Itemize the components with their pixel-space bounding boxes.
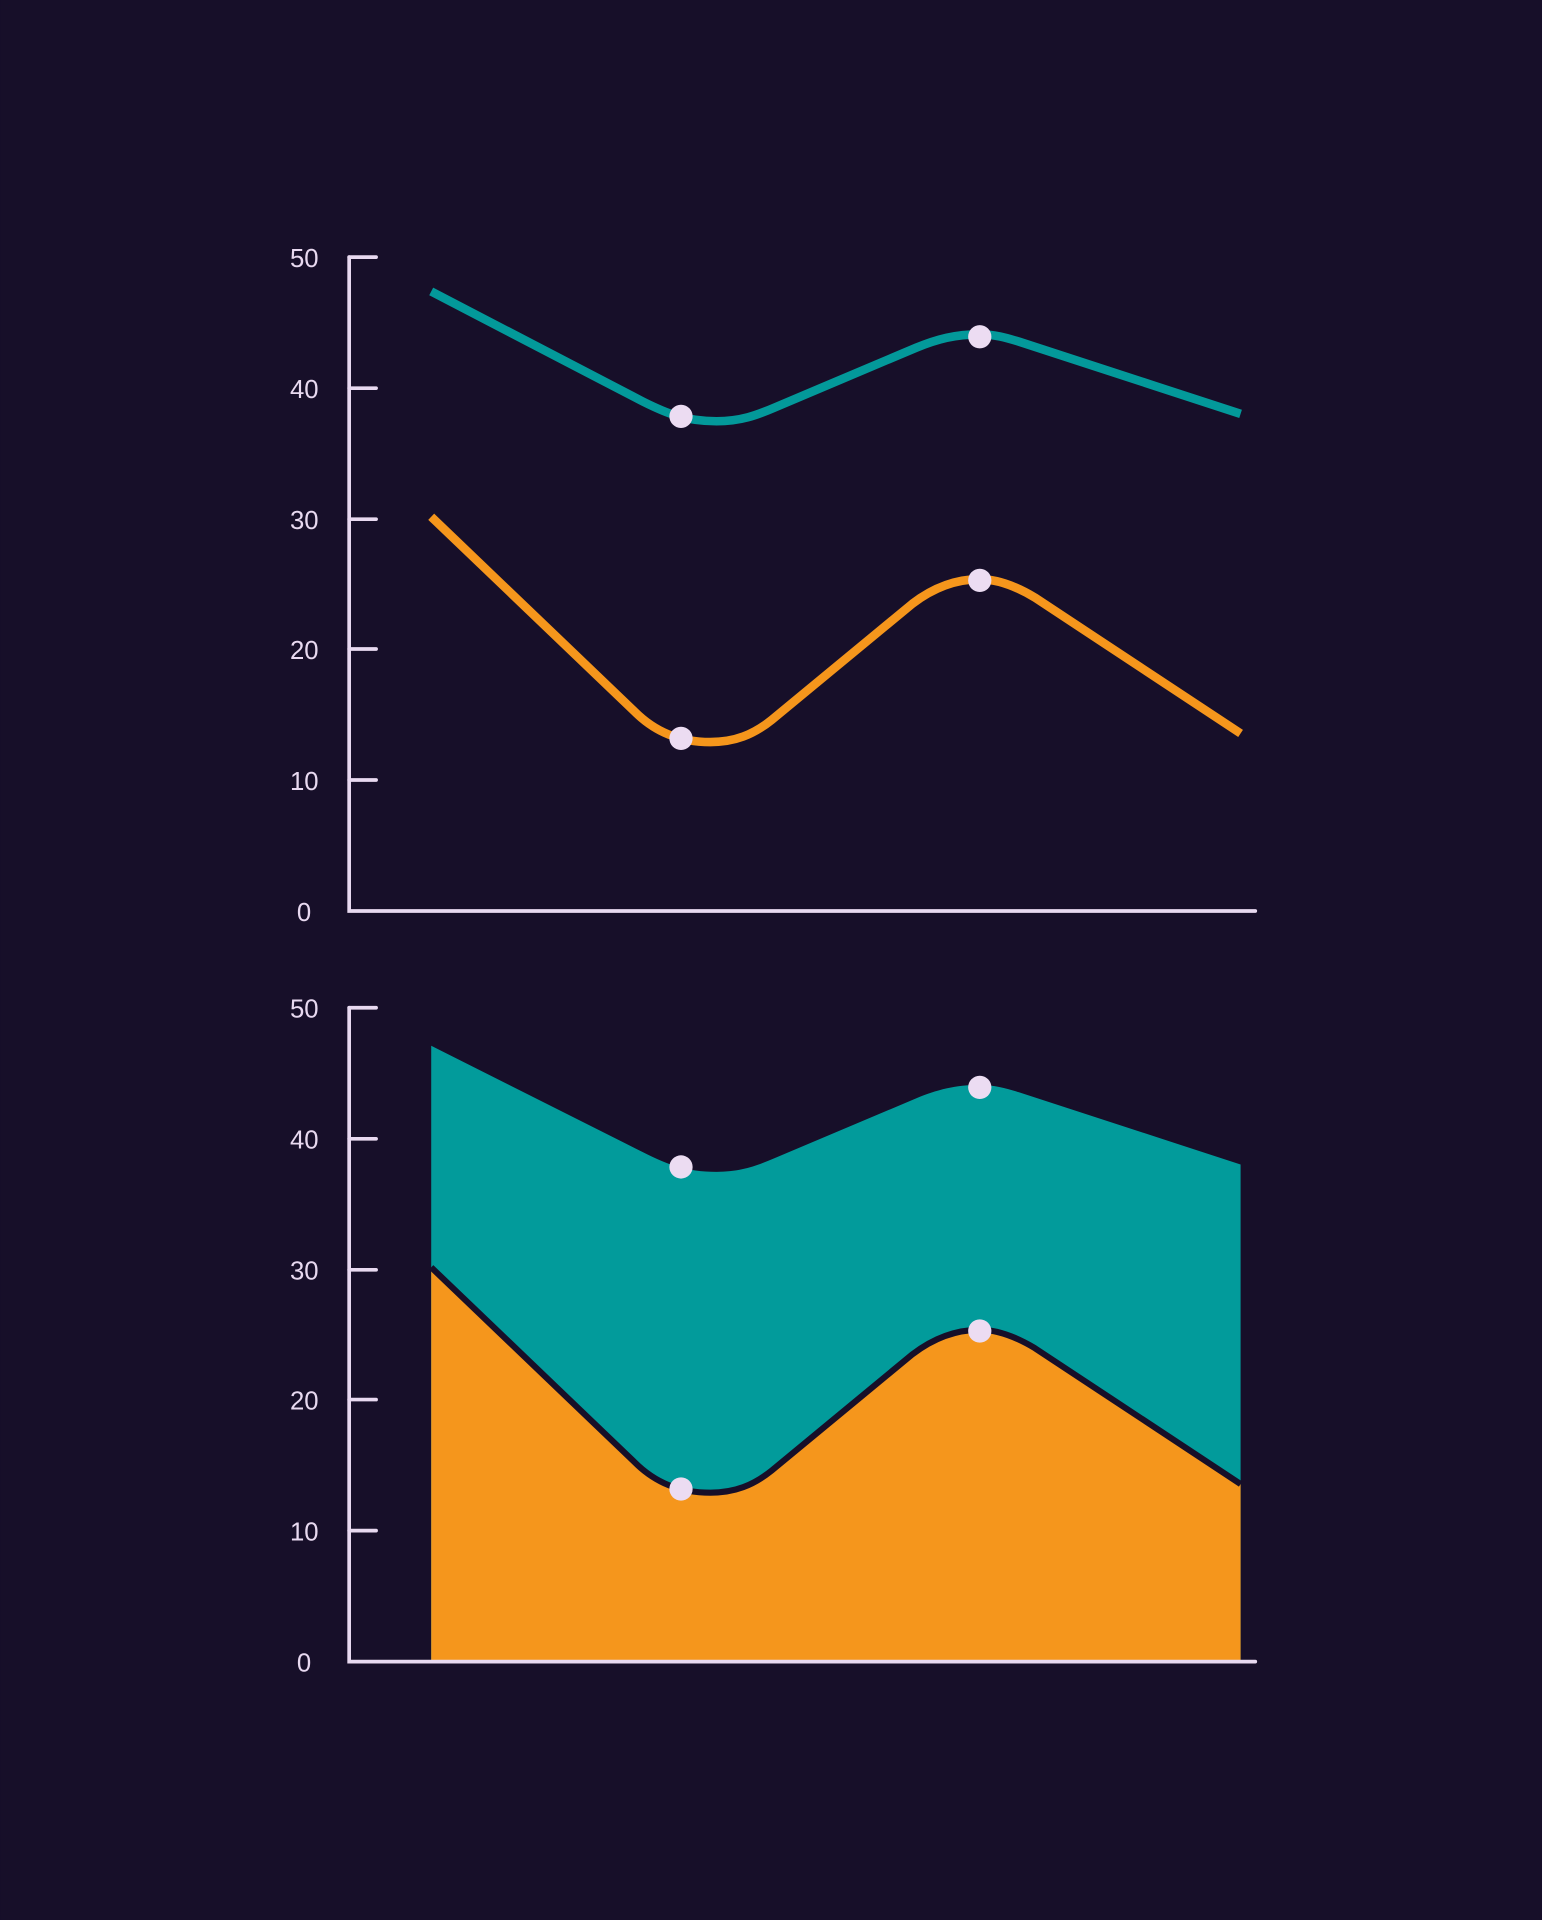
line chart y-axis labels: 20	[290, 637, 319, 665]
area plot	[431, 1046, 1241, 1662]
line chart y-axis labels: 30	[290, 507, 319, 535]
area chart y-axis labels: 10	[290, 1518, 319, 1546]
orange area	[431, 1267, 1241, 1662]
orange line series	[431, 517, 1241, 742]
area chart y-axis labels: 40	[290, 1127, 319, 1155]
teal area	[431, 1046, 1241, 1662]
teal line series	[431, 291, 1241, 421]
line chart	[290, 245, 1255, 927]
area chart y-axis labels	[290, 996, 319, 1677]
area chart	[290, 996, 1255, 1677]
area chart axes	[349, 1008, 1255, 1662]
area chart y-axis labels: 50	[290, 996, 319, 1024]
line chart markers	[669, 325, 991, 750]
area chart y-axis labels: 20	[290, 1387, 319, 1415]
orange boundary stroke	[431, 1267, 1241, 1493]
line chart y-axis labels: 50	[290, 245, 319, 273]
area chart y-axis labels: 0	[297, 1649, 311, 1677]
line chart y-axis labels: 40	[290, 376, 319, 404]
line chart axes	[349, 257, 1255, 911]
line chart y-axis labels: 10	[290, 768, 319, 796]
area chart y-axis labels: 30	[290, 1258, 319, 1286]
line chart y-axis labels	[290, 245, 319, 927]
line chart y-axis labels: 0	[297, 899, 311, 927]
area chart markers	[669, 1076, 991, 1501]
